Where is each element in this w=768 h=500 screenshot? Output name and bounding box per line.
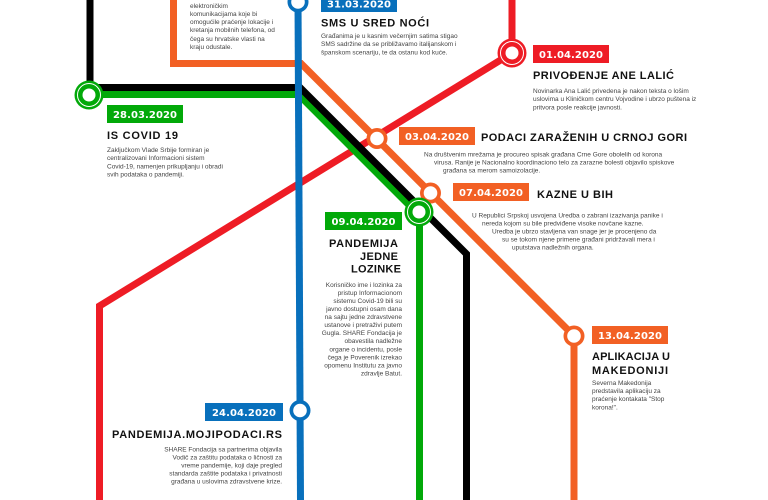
description — [107, 147, 223, 178]
text block: top orange entry — [190, 3, 275, 51]
event: 28.03.2020 — [107, 105, 223, 178]
description: SHARE Fondacija sa partnerima objavila — [164, 446, 282, 454]
description: na sajtu jedne zdravstvene — [325, 314, 402, 321]
heading: PANDEMIJA — [329, 238, 398, 250]
heading: PANDEMIJA.MOJIPODACI.RS — [112, 429, 282, 441]
date label: 07.04.2020 — [459, 188, 523, 199]
description — [322, 282, 402, 378]
description: uputstava nadležnih organa. — [512, 244, 594, 252]
description: opomenu Institutu za javno — [324, 362, 402, 370]
heading: LOZINKE — [351, 264, 401, 276]
description: Na društvenim mrežama je procureo spisak građana Crne Gore obolelih od korona — [424, 152, 662, 158]
event: 03.04.2020 — [399, 127, 687, 174]
heading: MAKEDONIJI — [592, 365, 668, 377]
station marker: 07.04 — [420, 182, 441, 204]
description: centralizovani Informacioni sistem — [107, 155, 205, 162]
description: praćenje kontakata "Stop — [592, 396, 665, 403]
event: 24.04.2020 — [112, 403, 283, 486]
metro line: blue — [298, 0, 300, 500]
description: građana u uslovima zdravstvene krize. — [171, 478, 282, 486]
description: svih podataka o pandemiji. — [107, 172, 184, 178]
date label — [325, 212, 402, 230]
event: 07.04.2020 — [453, 183, 663, 252]
heading: IS COVID 19 — [107, 130, 178, 142]
description: virusa. Ranije je Nacionalno koordinaciono telo za zarazne bolesti objavilo spiskove — [434, 160, 675, 166]
metro line: green — [89, 94, 420, 500]
description: pristup Informacionom — [338, 290, 402, 297]
text block: top orange entry: elektroničkim — [190, 3, 228, 10]
date label: 13.04.2020 — [598, 331, 662, 342]
description — [164, 446, 282, 486]
heading — [329, 238, 401, 276]
station marker: 28.03 — [74, 80, 104, 110]
text block: top orange entry: čega su hrvatske vlasti na — [190, 36, 265, 43]
text block: top orange entry: komunikacijama koje bi — [190, 11, 257, 18]
heading: JEDNE — [360, 251, 398, 263]
event: 09.04.2020 — [322, 212, 402, 378]
description: Vodič za zaštitu podataka o ličnosti za — [173, 454, 282, 462]
station marker: 03.04 — [366, 128, 388, 149]
description: Građanima je u kasnim večernjim satima stigao — [321, 33, 458, 40]
description — [592, 380, 665, 412]
metro line: orange — [174, 0, 574, 500]
description: Korisničko ime i lozinka za — [326, 282, 402, 289]
heading: SMS U SRED NOĆI — [321, 16, 429, 30]
station marker: 09.04 — [404, 198, 434, 226]
date label: 03.04.2020 — [405, 132, 469, 143]
station marker: 24.04 — [290, 400, 310, 421]
description — [424, 152, 675, 174]
description: standarda zaštite podataka i privatnosti — [169, 470, 282, 478]
heading — [592, 351, 670, 377]
description: korona!". — [592, 404, 618, 412]
description: pritvora posle reakcije javnosti. — [533, 104, 622, 112]
description: organe o incidentu, posle — [329, 346, 402, 354]
date label: 01.04.2020 — [539, 50, 603, 61]
description: čega je Poverenik izrekao — [328, 354, 402, 362]
heading: KAZNE U BIH — [537, 189, 613, 201]
description: Gugla. SHARE Fondacija je — [322, 330, 402, 337]
description — [533, 88, 696, 112]
metro line: black — [90, 0, 466, 500]
event: 31.03.2020 — [321, 0, 458, 56]
date label: 09.04.2020 — [332, 217, 396, 228]
description: zdravlje Batut. — [361, 370, 402, 378]
heading: APLIKACIJA U — [592, 351, 670, 363]
description: predstavila aplikaciju za — [592, 388, 661, 395]
description: vreme pandemije, koji daje pregled — [181, 462, 282, 470]
event: 01.04.2020 — [533, 45, 696, 112]
date label — [453, 183, 529, 201]
description: španskom scenariju, te da ostanu kod kuće. — [321, 50, 448, 56]
description: su se tokom njene primene građani pridržavali mera i — [502, 236, 655, 244]
date label — [205, 403, 283, 421]
description: U Republici Srpskoj usvojena Uredba o zabrani izazivanja panike i — [472, 212, 663, 220]
description: Severna Makedonija — [592, 380, 652, 387]
description: sistemu Covid-19 bili su — [333, 298, 402, 305]
text block: top orange entry: kretanja mobilnih telefona, od — [190, 27, 275, 34]
description: nereda kojom su bile predviđene visoke novčane kazne. — [482, 220, 644, 228]
description: ustanove i pretraživi putem — [324, 322, 402, 329]
description: građana sa merom samoizolacije. — [443, 168, 540, 174]
date label — [399, 127, 475, 145]
description: Uredba je ubrzo stavljena van snage jer je procenjeno da — [492, 228, 657, 236]
heading: PRIVOĐENJE ANE LALIĆ — [533, 69, 674, 82]
station marker: 01.04 — [498, 38, 526, 68]
station marker: 31.03 — [288, 0, 308, 12]
metro line: red — [100, 0, 512, 500]
description: SMS sadržine da se približavamo italijanskom i — [321, 41, 456, 48]
heading: PODACI ZARAŽENIH U CRNOJ GORI — [481, 131, 687, 144]
date label: 24.04.2020 — [212, 408, 276, 419]
description: uslovima u Kliničkom centru Vojvodine i ubrzo puštena iz — [533, 96, 696, 103]
date label: 28.03.2020 — [113, 110, 177, 121]
description: Novinarka Ana Lalić privedena je nakon teksta o lošim — [533, 88, 689, 95]
description: Covid-19, namenjen prikupljanju i obradi — [107, 164, 223, 170]
event: 13.04.2020 — [592, 326, 670, 412]
station marker: 13.04 — [564, 326, 584, 346]
description: Zaključkom Vlade Srbije formiran je — [107, 147, 210, 154]
description — [321, 33, 458, 56]
description — [472, 212, 663, 252]
text block: top orange entry: omogućile praćenje lokacije i — [190, 19, 273, 26]
date label — [533, 45, 609, 63]
text block: top orange entry: kraju odustale. — [190, 44, 232, 51]
description: obavestila nadležne — [345, 338, 402, 345]
description: javno dostupni osam dana — [325, 306, 402, 313]
